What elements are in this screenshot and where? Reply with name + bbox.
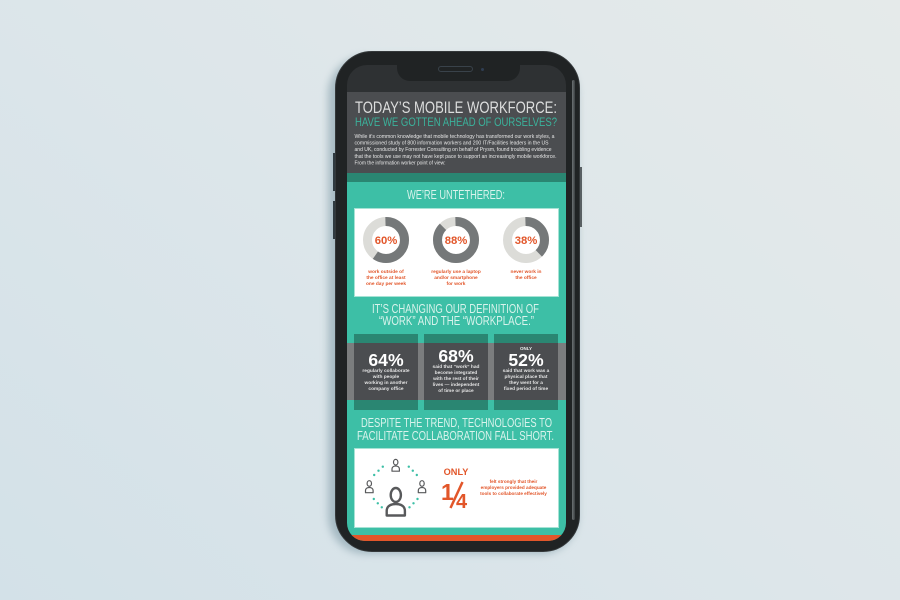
stat card: 52% bbox=[494, 334, 558, 410]
screen top bezel bbox=[347, 65, 566, 105]
person right bbox=[418, 481, 425, 493]
caption: regularly collaborate bbox=[362, 369, 410, 374]
camera bbox=[481, 68, 484, 70]
caption bbox=[362, 368, 410, 392]
caption: of time or place bbox=[438, 389, 474, 394]
intro text: and UK, conducted by Forrester Consulting on behalf of Prysm, found troubling evidence bbox=[354, 147, 552, 153]
side button bbox=[580, 167, 582, 227]
donut chart: 60%: 60% bbox=[375, 235, 397, 247]
label: 60%: work outside of bbox=[368, 270, 404, 274]
intro text: While it’s common knowledge that mobile technology has transformed our work styles, a bbox=[354, 134, 555, 140]
left lower button bbox=[333, 201, 335, 239]
caption: with people bbox=[373, 375, 399, 380]
label: 60%: the office at least bbox=[366, 276, 406, 281]
phone shadow bbox=[328, 56, 578, 554]
caption: physical place that bbox=[505, 375, 547, 380]
label: 60% bbox=[366, 270, 406, 287]
card centre bbox=[354, 343, 418, 400]
caption: said that “work” had bbox=[433, 365, 479, 370]
label: 38%: the office bbox=[515, 276, 537, 281]
label: 88%: for work bbox=[447, 282, 465, 287]
caption: fixed period of time bbox=[504, 387, 548, 392]
caption: employers provided adequate bbox=[481, 485, 546, 490]
donut chart: 88%: 88% bbox=[445, 235, 467, 247]
caption: they went for a bbox=[509, 381, 543, 386]
caption: felt strongly that their bbox=[490, 479, 537, 484]
donut chart: 38%: 38% bbox=[515, 235, 537, 247]
screen bbox=[347, 92, 566, 541]
label: 88%: regularly use a laptop bbox=[431, 270, 481, 274]
label: 38%: never work in bbox=[511, 270, 541, 274]
intro text bbox=[354, 134, 556, 167]
caption: with the rest of their bbox=[433, 377, 479, 382]
dots bbox=[372, 466, 418, 508]
figure: 52% bbox=[508, 350, 544, 370]
heading: definition of work bbox=[372, 302, 539, 328]
icon: people network bbox=[364, 458, 426, 517]
orange footer bbox=[347, 535, 566, 541]
caption: lives — independent bbox=[433, 383, 479, 388]
intro band bbox=[347, 92, 566, 173]
caption: said that work was a bbox=[503, 369, 549, 374]
stat card: 68% bbox=[424, 334, 488, 410]
caption: tools to collaborate effectively bbox=[480, 491, 547, 496]
person top bbox=[392, 459, 399, 471]
caption: company office bbox=[368, 387, 404, 392]
figure: 64% bbox=[368, 350, 404, 370]
caption bbox=[480, 479, 547, 496]
person centre bbox=[386, 488, 404, 516]
intro text: that the tools we use may not have kept pace to support an increasingly mobile workforce. bbox=[354, 154, 556, 160]
only label: ONLY bbox=[520, 346, 532, 351]
figure: one quarter: 1 bbox=[440, 479, 454, 505]
intro text: From the information worker point of view: bbox=[354, 161, 446, 167]
donut chart: 38% bbox=[503, 217, 549, 263]
card centre bbox=[424, 343, 488, 400]
heading: technologies fall short bbox=[357, 416, 554, 443]
left buttons bbox=[333, 153, 335, 191]
stat card: 64% bbox=[354, 334, 418, 410]
person left bbox=[365, 481, 373, 493]
only: ONLY bbox=[444, 467, 468, 477]
right edge highlight bbox=[572, 80, 575, 520]
caption: working in another bbox=[365, 381, 407, 386]
gray band bbox=[347, 343, 566, 400]
notch bbox=[397, 64, 520, 81]
phone body bbox=[335, 51, 580, 552]
label: 60%: one day per week bbox=[366, 282, 406, 287]
phone bbox=[324, 51, 582, 558]
label: 88% bbox=[431, 270, 481, 287]
card centre bbox=[494, 343, 558, 400]
panel: untethered bbox=[354, 208, 558, 296]
heading: untethered: WE’RE UNTETHERED: bbox=[407, 187, 505, 202]
donut chart: 88% bbox=[433, 217, 479, 263]
panel: collaboration bbox=[354, 448, 558, 528]
figure: one quarter bbox=[440, 479, 468, 510]
intro text: commissioned study of 800 information workers and 200 IT/Facilities leaders in the US bbox=[354, 140, 549, 146]
caption: become integrated bbox=[435, 371, 477, 376]
donut chart: 60% bbox=[363, 217, 409, 263]
figure: 68% bbox=[438, 346, 474, 366]
caption bbox=[432, 364, 480, 394]
label: 38% bbox=[510, 270, 542, 281]
label: 88%: and/or smartphone bbox=[434, 276, 478, 281]
speaker bbox=[438, 66, 473, 72]
caption bbox=[502, 368, 550, 392]
dark green strip bbox=[347, 173, 566, 182]
